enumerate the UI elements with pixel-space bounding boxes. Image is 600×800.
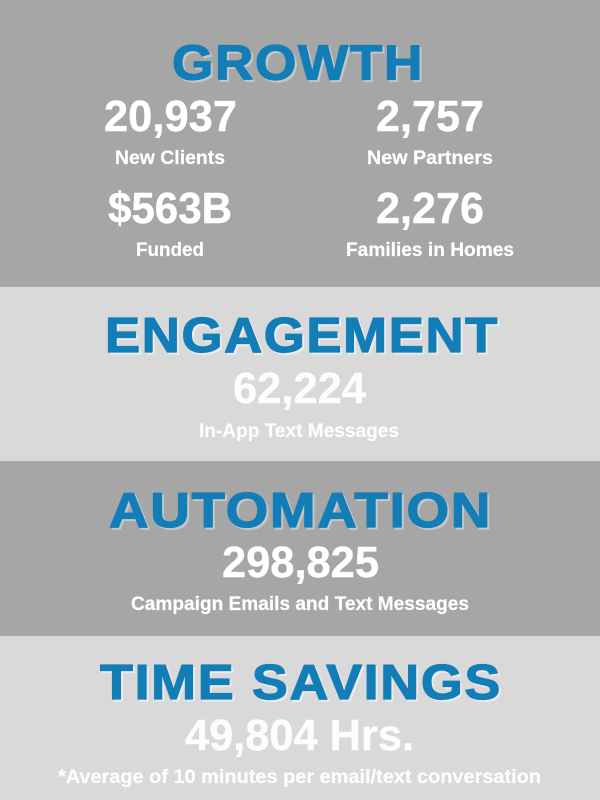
stat: families in homes: 2,276: [376, 185, 484, 233]
stat: new clients: New Clients: [115, 147, 225, 169]
stat: funded: $563B: [108, 185, 232, 233]
stat: funded: [108, 185, 232, 261]
stat: campaign emails and text messages: [131, 539, 469, 615]
stat: hours saved: *Average of 10 minutes per email/text conversation: [58, 766, 541, 788]
stat: in-app text messages: [199, 365, 399, 442]
stat: families in homes: Families in Homes: [346, 239, 514, 261]
stat: hours saved: 49,804 Hrs.: [185, 712, 414, 760]
panel: automation: [0, 461, 600, 636]
stat: campaign emails and text messages: Campaign Emails and Text Messages: [131, 593, 469, 615]
stat: new partners: New Partners: [367, 147, 493, 169]
stat: new partners: 2,757: [376, 93, 484, 141]
stat: families in homes: [346, 185, 514, 261]
stat: new clients: 20,937: [104, 93, 237, 141]
stat: funded: Funded: [136, 239, 204, 261]
panel: time savings: [0, 636, 600, 800]
heading: time savings: TIME SAVINGS: [100, 655, 502, 710]
stat: hours saved: [58, 712, 541, 788]
heading: growth: GROWTH: [172, 36, 424, 90]
stat: new partners: [367, 93, 493, 169]
stat: in-app text messages: In-App Text Messages: [199, 420, 399, 442]
heading: engagement: ENGAGEMENT: [105, 308, 499, 363]
stat: in-app text messages: 62,224: [233, 365, 366, 413]
stat: new clients: [104, 93, 237, 169]
panel: engagement: [0, 287, 600, 461]
heading: automation: AUTOMATION: [109, 483, 492, 538]
stat: campaign emails and text messages: 298,825: [222, 539, 379, 587]
panel: growth: [0, 0, 600, 287]
